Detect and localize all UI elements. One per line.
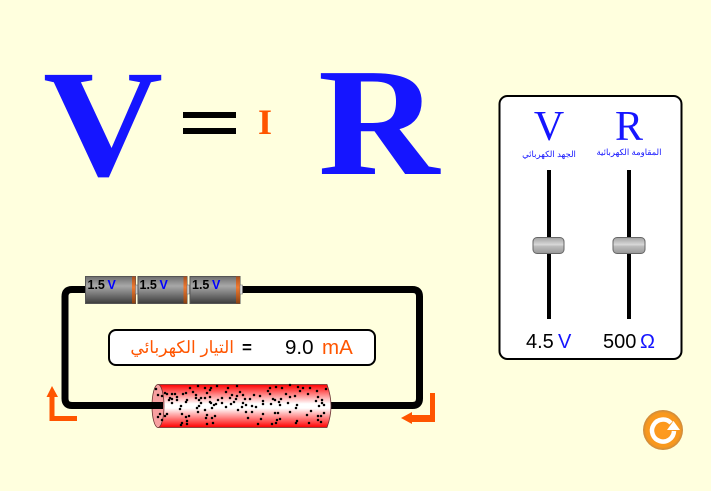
- battery 2: 1.5: [140, 278, 157, 292]
- circuit wire: [65, 290, 420, 406]
- resistance value: Ω: [640, 331, 655, 353]
- battery 2: [138, 276, 190, 304]
- formula: V = I R: [43, 36, 441, 209]
- equals: =: [242, 338, 252, 357]
- battery 3: [190, 276, 242, 304]
- wire end in resistor: [130, 402, 163, 409]
- battery 2: V: [160, 278, 168, 292]
- battery 1: V: [108, 278, 116, 292]
- battery pack: [86, 276, 242, 304]
- arrow: current right: [401, 393, 435, 424]
- battery 3: V: [212, 278, 221, 292]
- voltage heading: V: [534, 104, 564, 150]
- formula letter R: R: [318, 36, 441, 207]
- current label: التيار الكهربائي: [130, 338, 234, 358]
- voltage value: V: [558, 331, 572, 353]
- arrow: current left: [46, 386, 77, 421]
- resistance value: 500: [603, 331, 636, 353]
- formula letter V: V: [43, 39, 163, 209]
- electrons: [156, 385, 326, 425]
- battery 1: 1.5: [88, 278, 105, 292]
- resistance heading: [596, 104, 662, 158]
- resistance heading: R: [615, 104, 643, 150]
- resistor with electrons: [130, 384, 331, 428]
- resistance value: [603, 331, 655, 353]
- equals sign: [183, 112, 236, 134]
- resistance slider: [613, 170, 645, 319]
- resistance heading: المقاومة الكهربائية: [596, 147, 662, 158]
- formula letter I: I: [258, 102, 272, 142]
- battery 3: 1.5: [192, 278, 209, 292]
- voltage value: 4.5: [526, 331, 554, 353]
- battery 1: [86, 276, 138, 304]
- current readout box: [109, 330, 375, 365]
- voltage heading: الجهد الكهربائي: [522, 149, 576, 160]
- control panel: [500, 96, 682, 359]
- voltage heading: [522, 104, 576, 160]
- current unit: mA: [322, 336, 353, 359]
- voltage value: [526, 331, 572, 353]
- voltage slider: [533, 170, 564, 319]
- reset button: [643, 410, 683, 450]
- current value: 9.0: [285, 336, 314, 359]
